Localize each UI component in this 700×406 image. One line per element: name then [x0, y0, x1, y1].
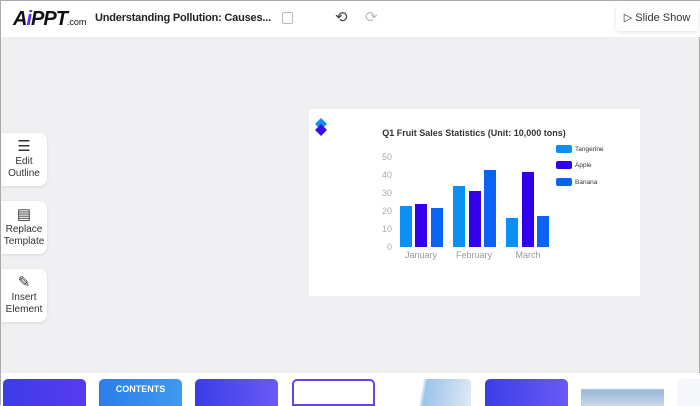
thumbnail strip — [1, 373, 700, 406]
button: edit outline: Edit — [15, 156, 33, 167]
button: replace template: Replace — [6, 224, 42, 235]
header bar — [1, 1, 700, 37]
button: replace template: ▤ — [17, 206, 31, 223]
thumbnail strip: CONTENTS — [116, 384, 165, 394]
button: insert element: Insert — [11, 292, 36, 303]
button: replace template — [1, 201, 47, 254]
x axis labels — [405, 250, 541, 260]
x axis labels: January — [405, 250, 438, 260]
icon: redo: ⟳ — [365, 9, 378, 26]
slide: chart — [309, 109, 640, 296]
legend: Tangerine — [575, 146, 604, 153]
legend: Banana — [575, 179, 598, 186]
y axis labels — [382, 152, 392, 252]
icon: save — [282, 12, 293, 24]
slide show button: ▷ Slide Show — [624, 12, 690, 24]
document title: Understanding Pollution: Causes... — [95, 12, 271, 24]
button: edit outline — [1, 133, 47, 186]
button: edit outline: ☰ — [17, 138, 31, 155]
legend — [556, 145, 604, 186]
y axis labels: 20 — [382, 206, 392, 216]
legend: Apple — [575, 162, 592, 169]
slide show button — [616, 5, 698, 31]
icon: undo: ⟲ — [335, 9, 348, 26]
button: replace template: Template — [4, 236, 44, 247]
y axis labels: 0 — [387, 242, 392, 252]
chart title: Q1 Fruit Sales Statistics (Unit: 10,000 tons) — [382, 128, 566, 138]
icon: logo diamond — [315, 118, 327, 136]
y axis labels: 50 — [382, 152, 392, 162]
x axis labels: February — [456, 250, 493, 260]
button: insert element: Element — [6, 304, 42, 315]
y axis labels: 40 — [382, 170, 392, 180]
bars — [400, 170, 549, 247]
y axis labels: 10 — [382, 224, 392, 234]
button: edit outline: Outline — [8, 168, 40, 179]
y axis labels: 30 — [382, 188, 392, 198]
logo: AiPPT.com — [13, 8, 86, 30]
button: insert element — [1, 269, 47, 322]
thumbnails — [3, 379, 86, 406]
button: insert element: ✎ — [18, 274, 30, 291]
x axis labels: March — [515, 250, 541, 260]
